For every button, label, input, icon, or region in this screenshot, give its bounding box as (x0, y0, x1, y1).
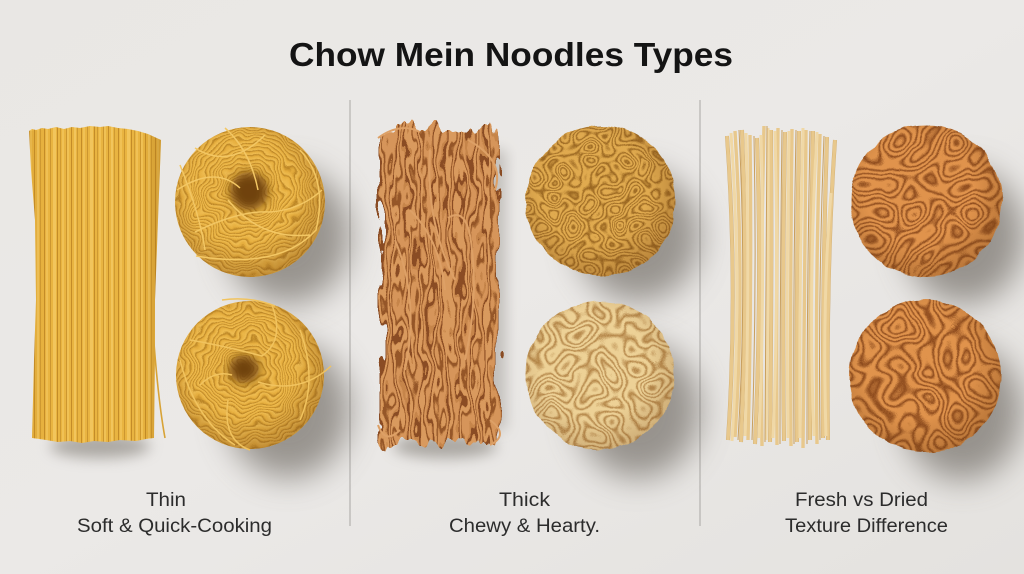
label: thick: Thick (499, 490, 551, 511)
dried noodle ball, top (850, 125, 1024, 304)
panel: thick noodles (378, 126, 700, 537)
dried noodle ball, bottom (849, 300, 1022, 480)
label: fresh vs dried: Texture Difference (785, 516, 948, 537)
dried straight noodle bundle (727, 126, 835, 448)
thin noodle nest, top (160, 112, 350, 304)
title: Chow Mein Noodles Types (289, 36, 733, 73)
panel: thin noodles (29, 112, 350, 537)
label: fresh vs dried (785, 490, 948, 537)
label: thin: Soft & Quick-Cooking (77, 516, 272, 537)
thick noodle ball, pale (526, 301, 700, 478)
label: thick: Chewy & Hearty. (449, 516, 600, 537)
label: thin (77, 490, 272, 537)
label: thick (449, 490, 600, 537)
panel: fresh vs dried (727, 125, 1024, 537)
thin noodle nest, bottom (160, 285, 350, 478)
thin noodle bundle (29, 126, 165, 458)
thick noodle bundle (378, 128, 506, 458)
label: fresh vs dried: Fresh vs Dried (795, 490, 928, 511)
thick noodle ball, golden (526, 126, 700, 302)
label: thin: Thin (146, 490, 186, 511)
